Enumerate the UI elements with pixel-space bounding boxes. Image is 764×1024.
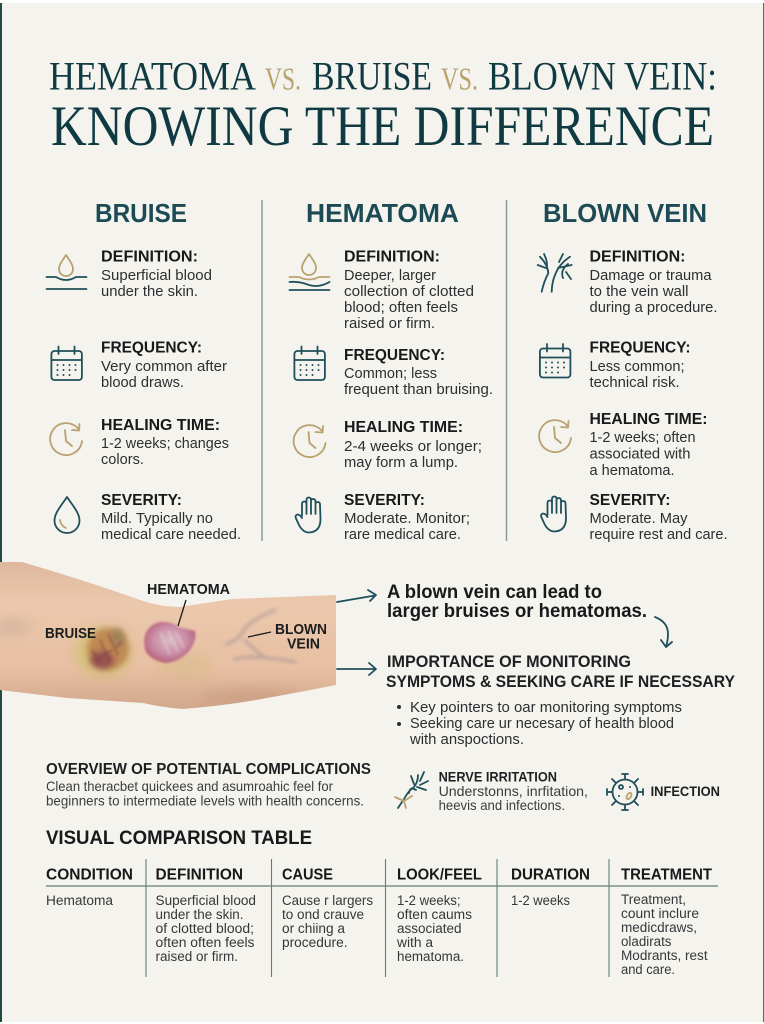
blown vein severity [590,492,728,543]
hematoma severity: rare medical care. [344,527,461,543]
bruise definition: Superficial blood [101,268,212,284]
blown vein definition: during a procedure. [590,300,718,316]
table header row [46,866,712,883]
table header row: TREATMENT [621,866,712,883]
bruise frequency: Very common after [101,359,227,375]
blown vein definition: DEFINITION: [590,249,686,266]
icon: calendar [51,346,82,380]
comparison table [46,859,718,978]
panel: complications overview [46,761,371,809]
blown vein frequency: FREQUENCY: [590,340,690,357]
bruise definition: under the skin. [101,284,198,300]
panel: complications overview: OVERVIEW OF POTENTIAL COMPLICATIONS [46,761,371,778]
table header row: CAUSE [282,866,333,883]
table body row: hematoma. [397,949,464,965]
blown vein frequency: Less common; [590,359,684,375]
table header row: CONDITION [46,866,133,883]
infection label: INFECTION [651,783,720,799]
label: hematoma [147,581,230,626]
blown vein definition [590,249,718,316]
bruise severity: SEVERITY: [101,492,182,509]
heading: monitoring: IMPORTANCE OF MONITORING [387,652,631,671]
table body row: 1-2 weeks [511,893,570,909]
hematoma severity [344,492,470,543]
icon: calendar [540,344,570,378]
table body row: with a [396,935,433,951]
heading: bruise: BRUISE [95,198,187,228]
title [49,54,717,158]
title: BRUISE [312,54,432,98]
bullet list [397,700,682,748]
hematoma definition [344,249,474,332]
hematoma definition: collection of clotted [344,284,474,300]
blown vein severity: SEVERITY: [590,492,670,509]
nerve irritation text: NERVE IRRITATION [439,769,557,785]
hematoma severity: SEVERITY: [344,492,425,509]
arm illustration [0,555,340,715]
hematoma definition: blood; often feels [344,300,458,316]
bruise mark [75,628,131,676]
hematoma frequency: Common; less [344,366,437,382]
hematoma healing time: may form a lump. [344,455,458,471]
table body row: 1-2 weeks; [397,893,460,909]
icon: drop over deep layers [290,254,330,290]
panel: blown vein [538,198,728,543]
label: blown vein: BLOWN [275,621,327,638]
nerve irritation text: heevis and infections. [439,798,565,813]
table body row: count inclure [621,906,699,922]
icon: drop [54,497,80,533]
blown vein healing time: associated with [590,447,690,463]
title: HEMATOMA [49,54,256,98]
hematoma healing time [344,419,482,471]
arrow: arm to monitoring note [337,663,376,675]
heading: monitoring [386,652,736,691]
table body row: Hematoma [46,893,113,909]
table body row: of clotted blood; [156,921,254,937]
heading: monitoring: SYMPTOMS & SEEKING CARE IF NECESSARY [386,672,736,691]
callout: blown vein note [387,581,647,622]
icon: calendar [294,346,325,380]
bruise frequency [101,340,227,391]
hematoma mark [144,622,215,677]
hematoma frequency: frequent than bruising. [344,382,493,398]
blown vein severity: require rest and care. [590,527,728,543]
bruise definition: DEFINITION: [101,249,198,266]
label: blown vein: VEIN [287,636,320,653]
table body row: or chiing a [282,921,345,937]
blown vein definition: to the vein wall [590,284,688,300]
hematoma definition: DEFINITION: [344,249,440,266]
bullet list: with anspoctions. [409,732,524,748]
hematoma frequency: FREQUENCY: [344,347,445,364]
table header row: LOOK/FEEL [397,866,482,883]
blown vein healing time: 1-2 weeks; often [590,430,696,446]
table body row: procedure. [282,935,348,951]
table body row: Treatment, [621,892,686,908]
blown vein mark [226,610,295,662]
label: hematoma: HEMATOMA [147,581,230,598]
icon: infection microbe [607,774,643,810]
icon: clock [294,425,326,457]
arrow: curved down [655,617,672,647]
title: BLOWN VEIN: [488,54,717,98]
table body row: oladirats [621,934,672,950]
hematoma severity: Moderate. Monitor; [344,511,470,527]
table body row: and care. [621,962,675,978]
table body row: Modrants, rest [621,948,708,964]
bruise healing time: HEALING TIME: [101,417,220,434]
panel: bruise [46,198,241,543]
callout: blown vein note: A blown vein can lead to [387,581,602,603]
table body row: raised or firm. [156,949,238,965]
hematoma frequency [344,347,493,398]
hematoma healing time: 2-4 weeks or longer; [344,439,482,455]
panel: hematoma [290,198,493,543]
icon: nerve [395,772,428,808]
table header row: DEFINITION [156,866,243,883]
panel: complications overview: Clean theracbet quickees and asumroahic feel for [46,779,333,794]
table body row: to ond crauve [282,907,364,923]
blown vein severity: Moderate. May [590,511,688,527]
bruise severity: Mild. Typically no [101,511,213,527]
table body row: often caums [397,907,472,923]
nerve irritation text [439,769,588,813]
table body row: often often feels [156,935,254,951]
bruise severity: medical care needed. [101,527,241,543]
blown vein definition: Damage or trauma [590,268,712,284]
table body row [46,892,708,978]
heading: hematoma: HEMATOMA [306,198,459,228]
callout: blown vein note: larger bruises or hematomas. [387,600,647,622]
table body row: associated [397,921,462,937]
label: bruise: BRUISE [45,625,96,642]
heading: visual comparison table: VISUAL COMPARISON TABLE [46,828,312,849]
bullet list: Key pointers to oar monitoring symptoms [410,700,682,716]
nerve irritation text: Understonns, inrfitation, [439,784,588,799]
table body row: under the skin. [156,907,244,923]
icon: drop above skin [46,255,86,289]
icon: clock [539,420,571,452]
hematoma definition: raised or firm. [344,316,435,332]
blown vein frequency [590,340,690,391]
panel: complications overview: beginners to intermediate levels with health concerns. [46,794,364,809]
title: VS. [441,60,478,96]
bruise healing time [101,417,229,468]
title: VS. [265,60,301,96]
hematoma definition: Deeper, larger [344,268,436,284]
bruise healing time: colors. [101,452,144,468]
blown vein frequency: technical risk. [590,375,680,391]
table body row: Cause r largers [282,893,373,909]
table body row: medicdraws, [621,920,697,936]
bruise severity [101,492,241,543]
panel: monitoring [386,652,736,748]
blown vein healing time: HEALING TIME: [590,411,708,428]
bruise frequency: blood draws. [101,375,184,391]
hematoma healing time: HEALING TIME: [344,419,463,436]
icon: hand [541,496,566,532]
icon: clock [50,423,82,455]
blown vein healing time: a hematoma. [590,463,674,479]
heading: blown vein: BLOWN VEIN [543,198,707,228]
bullet list: Seeking care ur necesary of health blood [410,716,674,732]
bruise healing time: 1-2 weeks; changes [101,436,229,452]
arrow: arm to blown vein note [337,590,376,602]
table body row: Superficial blood [156,893,256,909]
icon: hand [296,498,320,532]
bruise frequency: FREQUENCY: [101,340,202,357]
bruise definition [101,249,212,300]
table header row: DURATION [511,866,590,883]
icon: branching vein [538,254,572,292]
label: blown vein [248,621,327,653]
blown vein healing time [590,411,708,479]
